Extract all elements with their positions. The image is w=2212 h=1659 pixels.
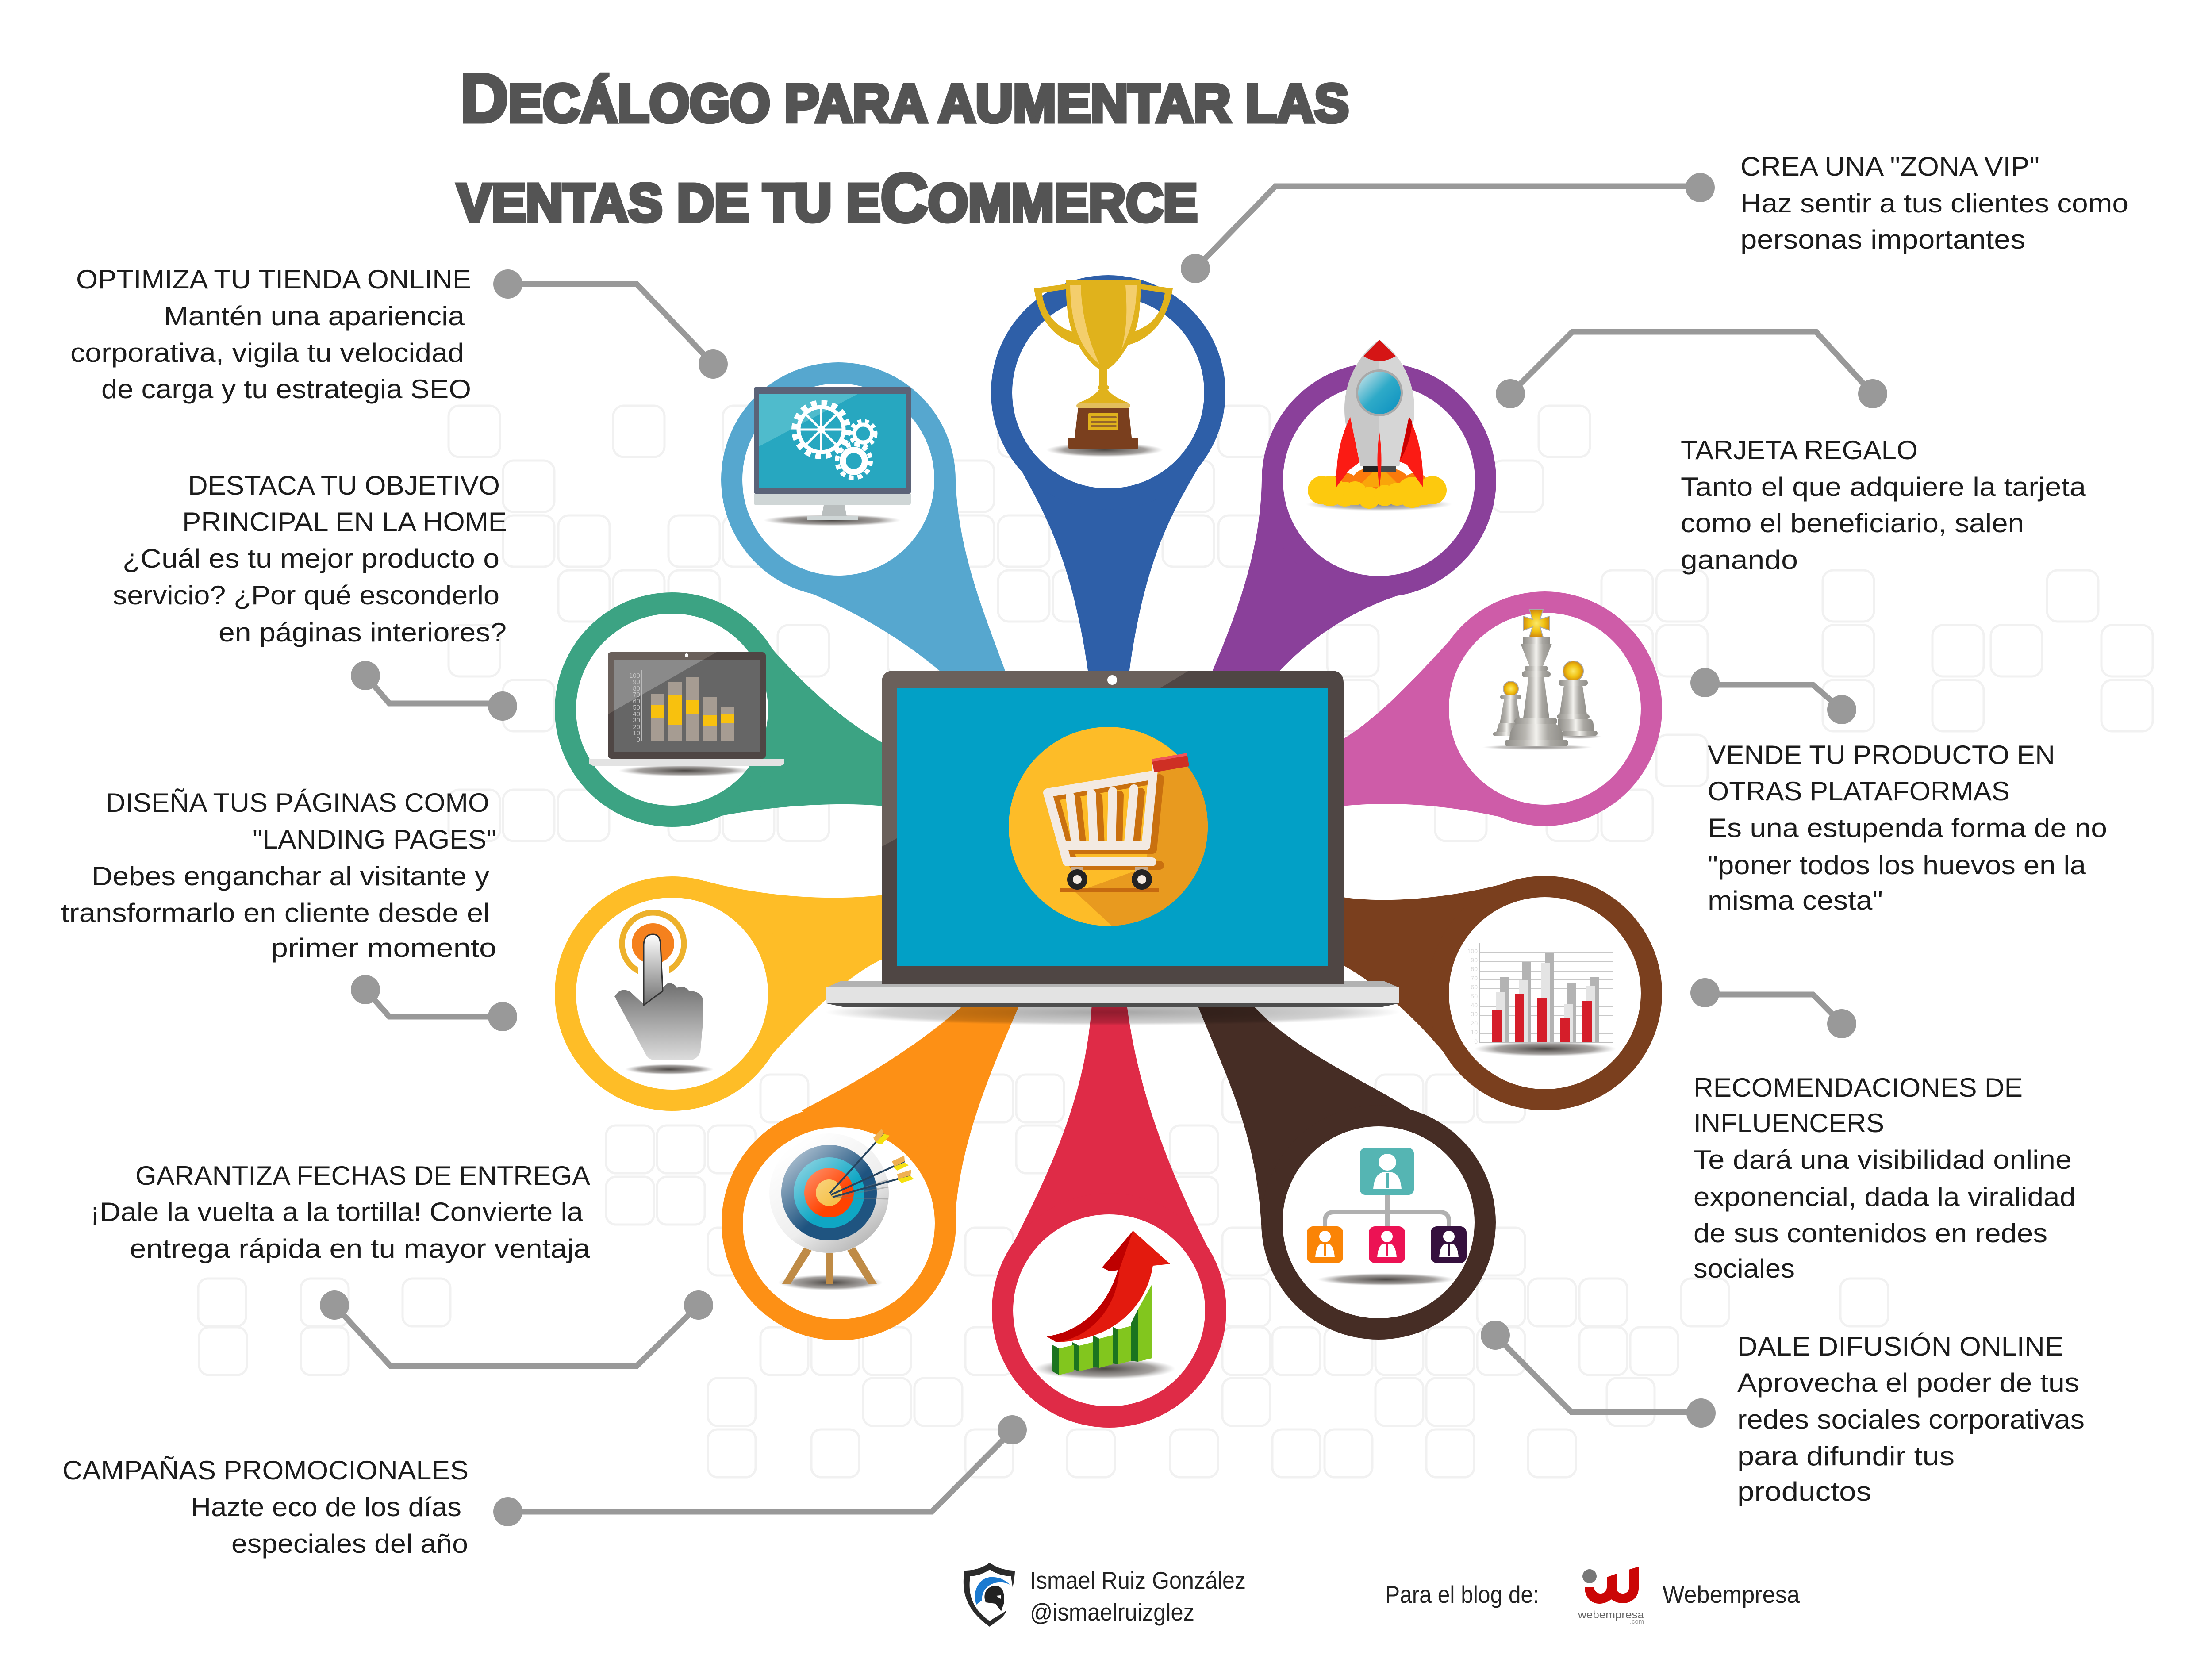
cart circle	[1009, 727, 1208, 926]
text: otras plataformas: "poner todos los huevos en la	[1708, 850, 2086, 880]
laptop bezel	[882, 671, 1344, 984]
icon: column chart: 100	[1467, 948, 1478, 955]
king	[1505, 610, 1568, 746]
icon: bar chart on laptop: 0	[637, 736, 640, 744]
footer: webempresa logo	[1578, 1567, 1644, 1625]
text: optimiza tu tienda online: OPTIMIZA TU TIENDA ONLINE	[76, 265, 471, 294]
text: destaca tu objetivo: DESTACA TU OBJETIVO	[188, 471, 500, 500]
flames	[1331, 469, 1428, 491]
pin: orange	[722, 1004, 1020, 1340]
text: zona vip: CREA UNA "ZONA VIP"	[1740, 152, 2039, 181]
icon: column chart: 40	[1471, 1002, 1478, 1009]
pin: yellow	[555, 876, 883, 1111]
icon: column chart: 50	[1471, 993, 1478, 1000]
left pawn	[1493, 681, 1521, 736]
icon: trophy	[1034, 280, 1173, 457]
title: DECÁLOGO PARA AUMENTAR LAS	[461, 60, 1349, 136]
text: landing pages	[61, 788, 496, 963]
text: otras plataformas	[1708, 740, 2107, 915]
footer: webempresa logo: webempresa	[1578, 1609, 1644, 1621]
connector: landing	[351, 975, 517, 1031]
text: campañas promocionales: CAMPAÑAS PROMOCIONALES	[62, 1455, 469, 1485]
text: optimiza tu tienda online: de carga y tu estrategia SEO	[101, 374, 471, 404]
connector: influencers	[1690, 978, 1856, 1038]
text: destaca tu objetivo: ¿Cuál es tu mejor producto o	[123, 544, 499, 573]
pin: dark brown	[1197, 1004, 1496, 1340]
text: otras plataformas: Es una estupenda forma de no	[1708, 813, 2107, 843]
text: landing pages: primer momento	[271, 933, 496, 963]
icon: target with arrows	[769, 1129, 914, 1290]
text: destaca tu objetivo: en páginas interiores?	[219, 618, 507, 647]
text: optimiza tu tienda online: corporativa, vigila tu velocidad	[70, 338, 464, 368]
icon: bar chart on laptop: 100	[629, 672, 640, 680]
text: fechas de entrega: ¡Dale la vuelta a la tortilla! Convierte la	[90, 1197, 584, 1227]
text: optimiza tu tienda online: Mantén una apariencia	[164, 301, 465, 331]
text: destaca tu objetivo: PRINCIPAL EN LA HOME	[182, 507, 507, 537]
footer: webempresa name: Webempresa	[1663, 1581, 1800, 1608]
icon: column chart	[1467, 943, 1616, 1056]
text: influencers: INFLUENCERS	[1694, 1108, 1884, 1138]
icon: rocket	[1306, 340, 1452, 511]
text: otras plataformas: OTRAS PLATAFORMAS	[1708, 776, 2010, 806]
text: destaca tu objetivo: servicio? ¿Por qué esconderlo	[113, 580, 499, 610]
footer: author: @ismaelruizglez	[1030, 1598, 1194, 1626]
connector: zona vip	[1181, 173, 1715, 283]
icon: column chart: 30	[1471, 1010, 1478, 1018]
text: difusión online	[1737, 1332, 2085, 1506]
icon: bar chart on laptop: 70	[633, 691, 640, 699]
text: influencers: Te dará una visibilidad online	[1694, 1145, 2072, 1175]
title: VENTAS DE TU ECOMMERCE	[457, 160, 1198, 236]
icon: bar chart on laptop: 20	[633, 723, 640, 731]
pin: pink	[1343, 591, 1662, 826]
icon: column chart: 90	[1471, 956, 1478, 964]
icon: bar chart on laptop: 30	[633, 717, 640, 724]
footer: para el blog: Para el blog de:	[1385, 1581, 1539, 1608]
text: influencers: RECOMENDACIONES DE	[1694, 1073, 2023, 1102]
text: otras plataformas: VENDE TU PRODUCTO EN	[1708, 740, 2055, 770]
text: zona vip: Haz sentir a tus clientes como	[1740, 188, 2128, 218]
text: difusión online: DALE DIFUSIÓN ONLINE	[1737, 1332, 2063, 1361]
shopping cart icon	[1009, 727, 1208, 926]
pin: red	[992, 1004, 1226, 1428]
text: difusión online: redes sociales corporativas	[1737, 1405, 2085, 1434]
text: optimiza tu tienda online	[70, 265, 471, 404]
icon: bar chart on laptop: 60	[633, 698, 640, 705]
icon: column chart: 0	[1474, 1038, 1478, 1045]
icon: column chart: 80	[1471, 965, 1478, 972]
footer: author: Ismael Ruiz González	[1030, 1567, 1246, 1594]
icon: bar chart on laptop	[589, 652, 784, 776]
text: campañas promocionales: especiales del año	[231, 1529, 468, 1559]
text: influencers: sociales	[1694, 1254, 1795, 1283]
text: landing pages: Debes enganchar al visitante y	[92, 861, 489, 891]
text: zona vip	[1740, 152, 2128, 254]
laptop base	[826, 981, 1399, 1007]
text: landing pages: "LANDING PAGES"	[253, 825, 496, 854]
pin: green	[555, 592, 883, 827]
pin: brown	[1343, 876, 1662, 1110]
text: tarjeta regalo: TARJETA REGALO	[1681, 435, 1918, 465]
pin: purple	[1210, 363, 1496, 677]
text: otras plataformas: misma cesta"	[1708, 886, 1883, 915]
pin: light blue	[721, 362, 1007, 677]
text: difusión online: productos	[1737, 1477, 1871, 1506]
text: difusión online: Aprovecha el poder de tus	[1737, 1368, 2079, 1398]
text: influencers: de sus contenidos en redes	[1694, 1218, 2047, 1248]
icon: column chart: 10	[1471, 1029, 1478, 1036]
people	[1315, 1154, 1459, 1257]
connector: fechas de entrega	[320, 1290, 713, 1366]
text: landing pages: DISEÑA TUS PÁGINAS COMO	[106, 788, 489, 818]
footer: shield logo	[964, 1563, 1015, 1627]
connector: destaca	[351, 661, 517, 721]
connector: campañas	[493, 1415, 1027, 1526]
connector: plataformas	[1690, 668, 1856, 724]
background tile pattern	[198, 406, 2153, 1477]
icon: org chart	[1307, 1148, 1467, 1286]
right pawn	[1557, 661, 1598, 736]
text: fechas de entrega: GARANTIZA FECHAS DE ENTREGA	[135, 1161, 590, 1190]
footer: webempresa logo: .com	[1630, 1618, 1644, 1625]
icon: bar chart on laptop: 80	[633, 685, 640, 692]
text: fechas de entrega: entrega rápida en tu mayor ventaja	[130, 1234, 591, 1263]
text: zona vip: personas importantes	[1740, 225, 2025, 254]
title	[457, 60, 1349, 236]
icon: column chart: 70	[1471, 975, 1478, 982]
text: tarjeta regalo: como el beneficiario, salen	[1681, 508, 2024, 538]
text: landing pages: transformarlo en cliente desde el	[61, 898, 490, 928]
icon: column chart: 60	[1471, 983, 1478, 991]
icon: hand tap	[614, 913, 714, 1075]
connector: optimiza	[493, 269, 728, 379]
gears	[794, 403, 876, 478]
icon: chess pieces	[1482, 610, 1601, 750]
text: tarjeta regalo: ganando	[1681, 545, 1798, 575]
icon: bar chart on laptop: 90	[633, 678, 640, 686]
icon: bar chart on laptop: 50	[633, 704, 640, 711]
connector: tarjeta regalo	[1496, 332, 1887, 408]
text: destaca tu objetivo	[113, 471, 507, 647]
icon: growth arrow	[1034, 1231, 1175, 1379]
central laptop	[825, 671, 1400, 1025]
text: campañas promocionales: Hazte eco de los días	[191, 1492, 461, 1522]
text: influencers: exponencial, dada la viralidad	[1694, 1182, 2076, 1212]
text: campañas promocionales	[62, 1455, 469, 1559]
icon: bar chart on laptop: 10	[633, 730, 640, 737]
laptop screen	[897, 688, 1328, 966]
text: influencers	[1694, 1073, 2076, 1283]
text: fechas de entrega	[90, 1161, 591, 1263]
icon: bar chart on laptop: 40	[633, 710, 640, 718]
text: difusión online: para difundir tus	[1737, 1441, 1955, 1471]
pin: blue	[991, 275, 1225, 677]
text: tarjeta regalo: Tanto el que adquiere la tarjeta	[1681, 472, 2086, 502]
icon: monitor with gears	[754, 387, 911, 526]
text: tarjeta regalo	[1681, 435, 2086, 575]
laptop shadow	[825, 999, 1400, 1025]
connector: difusión	[1481, 1321, 1716, 1428]
footer: author	[1030, 1567, 1246, 1626]
icon: column chart: 20	[1471, 1020, 1478, 1027]
